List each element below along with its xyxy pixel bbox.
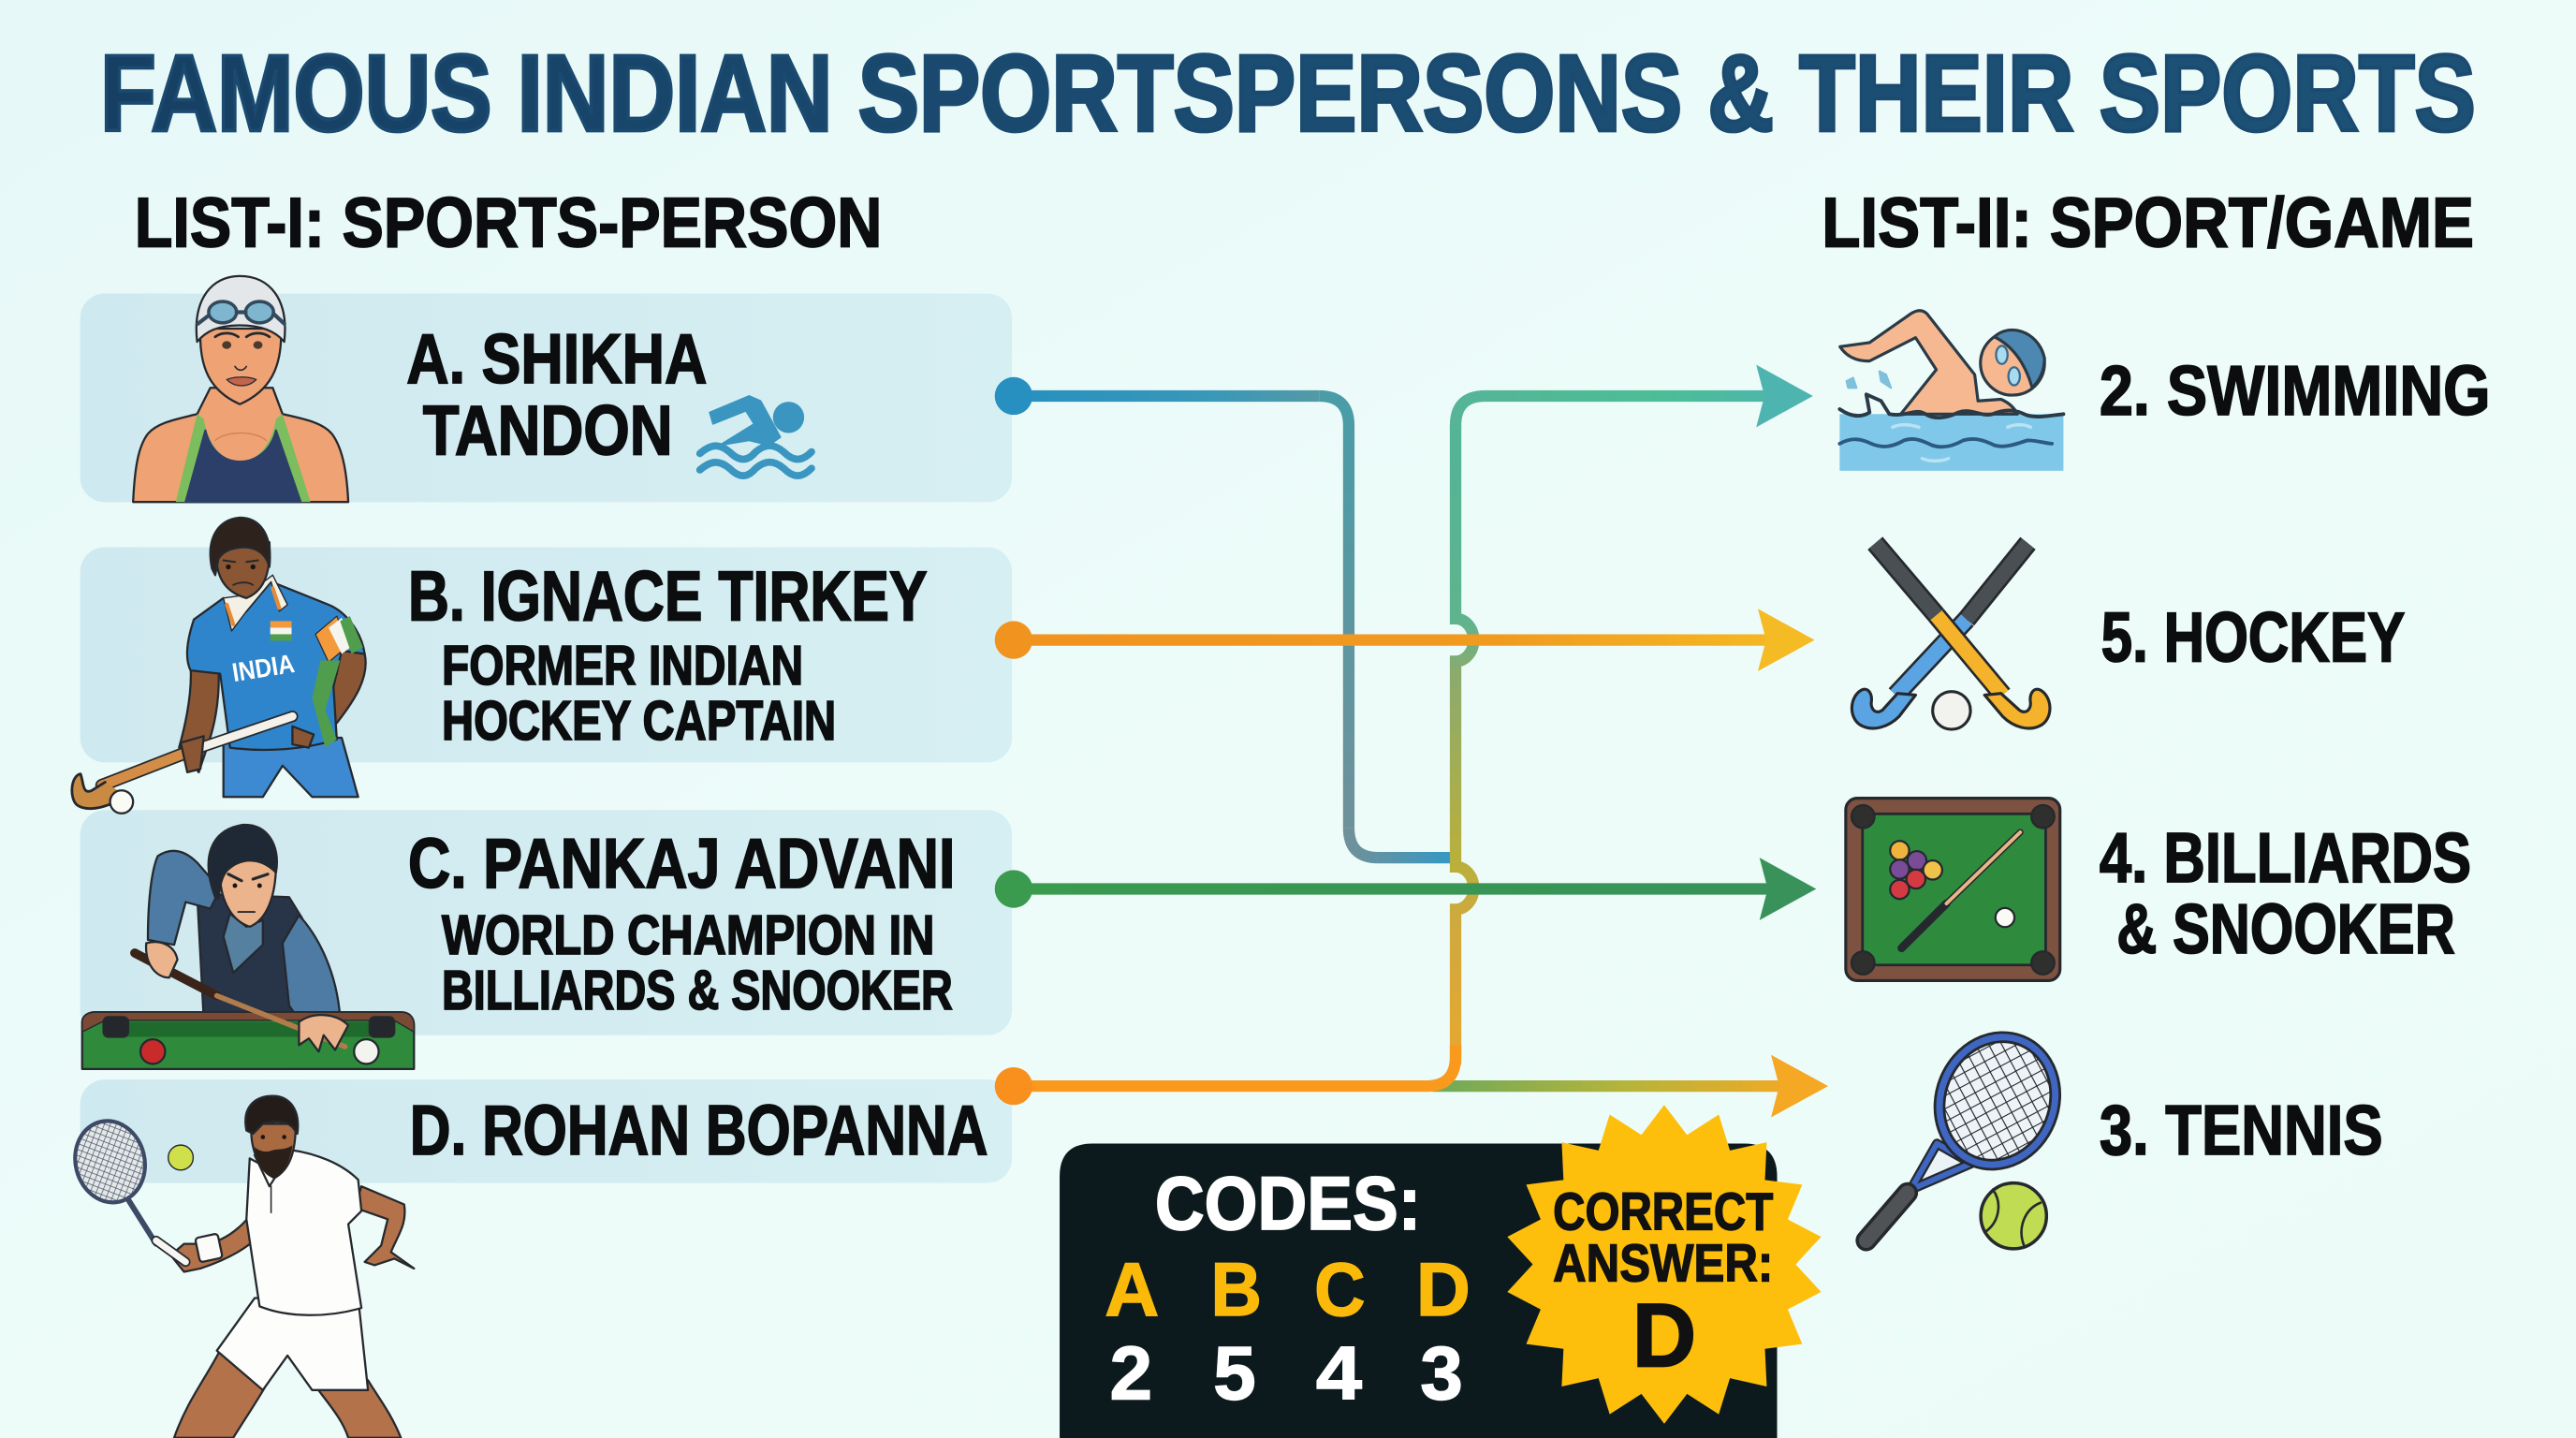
figure: hockey player Ignace Tirkey [72, 518, 366, 814]
connector: C to Billiards [995, 858, 1816, 920]
jersey lettering: India: INDIA [230, 649, 297, 687]
badge text: correct: CORRECT [1553, 1182, 1773, 1241]
callout: correct answer badge [1507, 1105, 1822, 1424]
connector: D to Tennis [995, 1045, 1828, 1117]
code letters: D [1416, 1248, 1471, 1332]
code numbers: 4 [1316, 1331, 1362, 1416]
connector: B to Hockey [995, 609, 1815, 671]
note: billiards and snooker: BILLIARDS & SNOOKER [442, 959, 953, 1021]
note: world champion in: WORLD CHAMPION IN [442, 903, 934, 966]
dot and arrowhead: A to Swimming [995, 365, 1813, 427]
codes panel [1060, 1144, 1777, 1438]
name: D. Rohan Bopanna: D. ROHAN BOPANNA [410, 1091, 988, 1169]
note: former Indian: FORMER INDIAN [442, 634, 803, 697]
label: and snooker: & SNOOKER [2116, 889, 2455, 968]
icon: swimming [1839, 311, 2063, 471]
name: C. Pankaj Advani: C. PANKAJ ADVANI [408, 824, 955, 902]
label: swimming: 2. SWIMMING [2100, 351, 2491, 430]
panel C: Pankaj Advani [80, 810, 1012, 1069]
panel A: Shikha Tandon [80, 276, 1012, 502]
code numbers: 3 [1420, 1331, 1463, 1416]
label: hockey: 5. HOCKEY [2101, 598, 2405, 677]
codes heading: CODES: [1155, 1162, 1421, 1246]
panel D: Rohan Bopanna [80, 1079, 1012, 1183]
label: billiards: 4. BILLIARDS [2100, 818, 2471, 897]
icon: tennis racket and ball [1866, 1020, 2074, 1249]
code letters: A [1105, 1248, 1159, 1332]
name: A. Shikha: A. SHIKHA [406, 319, 707, 398]
figure: swimmer Shikha Tandon [133, 276, 348, 502]
label: tennis: 3. TENNIS [2100, 1091, 2383, 1169]
code letters: C [1314, 1248, 1365, 1332]
icon: hockey sticks [1852, 543, 2050, 729]
icon: swim pictogram [700, 396, 812, 476]
code letters: B [1211, 1248, 1262, 1332]
heading: list II: LIST-II: SPORT/GAME [1822, 183, 2474, 261]
badge text: D: D [1632, 1285, 1696, 1386]
connector: A to Swimming, part routed down [1014, 396, 1453, 858]
figure: tennis player Rohan Bopanna [66, 1096, 414, 1438]
icon: billiards table [1846, 799, 2060, 980]
code numbers [1110, 1331, 1463, 1416]
code numbers: 5 [1213, 1331, 1256, 1416]
badge text: answer: ANSWER: [1553, 1233, 1773, 1292]
name: B. Ignace Tirkey: B. IGNACE TIRKEY [408, 557, 928, 636]
name: Tandon: TANDON [423, 390, 673, 469]
connector lines [995, 365, 1828, 1117]
note: hockey captain: HOCKEY CAPTAIN [442, 689, 836, 752]
code letters [1105, 1248, 1471, 1332]
heading: list I: LIST-I: SPORTS-PERSON [135, 183, 882, 261]
code numbers: 2 [1110, 1331, 1152, 1416]
connector: shared vertical rising to Swimming with jump arcs [1456, 396, 1764, 1064]
panel B: Ignace Tirkey [72, 518, 1012, 814]
figure: billiards player Pankaj Advani [82, 825, 414, 1069]
